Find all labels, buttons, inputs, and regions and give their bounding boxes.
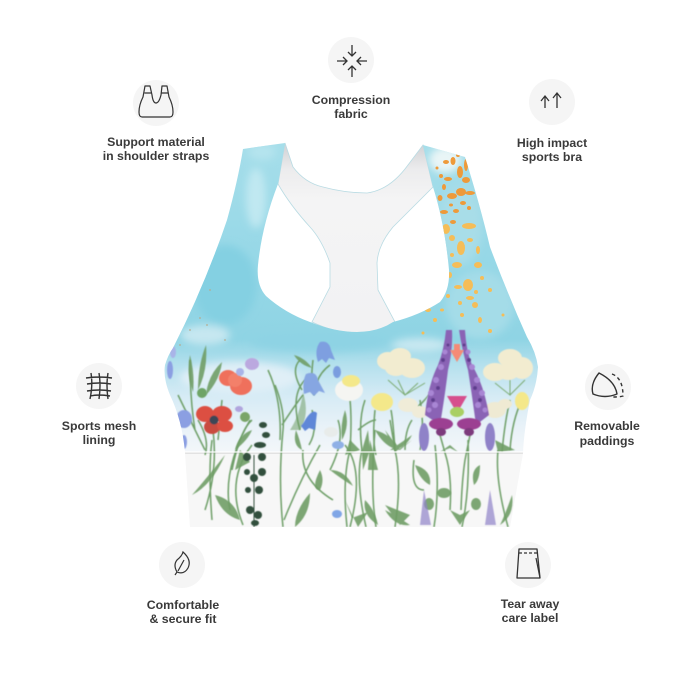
feature: support material in shoulder straps: [103, 80, 209, 163]
label: Compression: [312, 93, 390, 107]
thistles: [429, 396, 481, 436]
white umbel flowers: [377, 348, 533, 418]
bra front and band: [164, 143, 538, 527]
label: Removable: [574, 419, 640, 433]
label: lining: [83, 433, 115, 447]
daisies and yellow flowers: [324, 375, 529, 437]
feature: compression fabric: [312, 37, 390, 121]
icon: mesh: [76, 363, 122, 409]
flower stems: [178, 360, 522, 527]
label: Sports mesh: [62, 419, 136, 433]
label: Comfortable: [147, 598, 219, 612]
lupins: [419, 330, 496, 525]
sports bra product image: [164, 142, 538, 527]
salmon arrow mark: [450, 344, 464, 362]
leaves: [189, 345, 515, 527]
white band: [170, 452, 540, 532]
feature: high impact sports bra: [517, 79, 587, 164]
feature: sports mesh lining: [62, 363, 136, 447]
feature: removable paddings: [574, 364, 640, 448]
inner back panel: [278, 143, 433, 333]
label: fabric: [334, 107, 368, 121]
label: High impact: [517, 136, 587, 150]
label: sports bra: [522, 150, 582, 164]
icon: padding: [585, 364, 631, 410]
tiny left dots: [179, 289, 226, 346]
label: Support material: [107, 135, 205, 149]
watercolor clouds: [180, 144, 514, 394]
label: paddings: [580, 434, 634, 448]
icon: up arrows: [529, 79, 575, 125]
icon: feather: [159, 542, 205, 588]
icon: inward arrows: [328, 37, 374, 83]
label: care label: [502, 611, 558, 625]
label: Tear away: [501, 597, 559, 611]
dark vine: [243, 422, 270, 527]
icon: care label: [505, 542, 551, 588]
orange paint splatter: [436, 153, 475, 224]
poppies: [196, 370, 252, 434]
feature: comfortable and secure fit: [147, 542, 219, 626]
feature: tear away care label: [501, 542, 559, 625]
icon: bra straps: [133, 80, 179, 126]
blue and lilac flowers: [167, 342, 344, 518]
label: & secure fit: [150, 612, 216, 626]
label: in shoulder straps: [103, 149, 209, 163]
